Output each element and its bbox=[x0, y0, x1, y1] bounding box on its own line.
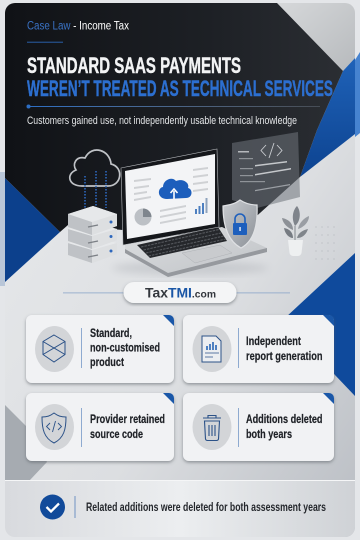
card text bbox=[246, 412, 322, 441]
corner accent bbox=[323, 393, 334, 404]
trackpad bbox=[182, 245, 232, 263]
card: source code bbox=[26, 393, 174, 461]
icon: server stack bbox=[68, 206, 117, 263]
card: additions deleted bbox=[183, 393, 334, 461]
card text: non-customised bbox=[90, 340, 160, 354]
card text: Provider retained bbox=[90, 412, 165, 426]
icon: potted plant bbox=[282, 206, 309, 256]
card text bbox=[90, 412, 165, 441]
illustration: SaaS laptop scene bbox=[68, 132, 334, 277]
card text: product bbox=[90, 355, 124, 369]
left edge tint bbox=[0, 172, 5, 286]
category label: Case Law - Income Tax bbox=[27, 20, 129, 32]
card text: Independent bbox=[246, 334, 301, 348]
floor shadow bbox=[112, 261, 268, 275]
icon: laptop bbox=[121, 149, 267, 277]
footer conclusion bbox=[40, 494, 326, 520]
icon: code shield bbox=[35, 404, 74, 450]
title bbox=[27, 53, 333, 101]
title rule bbox=[26, 104, 320, 108]
corner accent bbox=[163, 315, 174, 326]
icon: cube bbox=[35, 326, 74, 372]
screen: pie chart bbox=[134, 208, 152, 226]
corner accent bbox=[323, 315, 334, 326]
card text bbox=[246, 334, 322, 363]
blue edge band bbox=[355, 52, 360, 137]
icon: security shield bbox=[223, 200, 257, 248]
logo badge: TaxTMI.com bbox=[145, 286, 216, 300]
title: STANDARD SAAS PAYMENTS bbox=[27, 53, 241, 78]
card text: Additions deleted bbox=[246, 412, 322, 426]
card text bbox=[90, 326, 160, 369]
data streams bbox=[85, 171, 106, 214]
screen: bar chart bbox=[195, 198, 208, 214]
icon: code panel bbox=[232, 132, 300, 208]
keyboard bbox=[137, 227, 227, 258]
screen: text lines bbox=[134, 167, 208, 224]
icon: cloud outline bbox=[70, 150, 120, 186]
card text: Standard, bbox=[90, 326, 132, 340]
screen: cloud upload bbox=[159, 179, 192, 199]
icon: report bbox=[192, 326, 232, 372]
card text: source code bbox=[90, 427, 143, 441]
card: standard product bbox=[26, 315, 174, 383]
card text: report generation bbox=[246, 349, 322, 363]
corner accent bbox=[163, 393, 174, 404]
dot grid bbox=[316, 226, 334, 260]
icon: check badge bbox=[40, 494, 65, 520]
icon: trash bbox=[192, 404, 232, 450]
card: report generation bbox=[183, 315, 334, 383]
card text: both years bbox=[246, 427, 292, 441]
logo badge bbox=[63, 282, 290, 303]
